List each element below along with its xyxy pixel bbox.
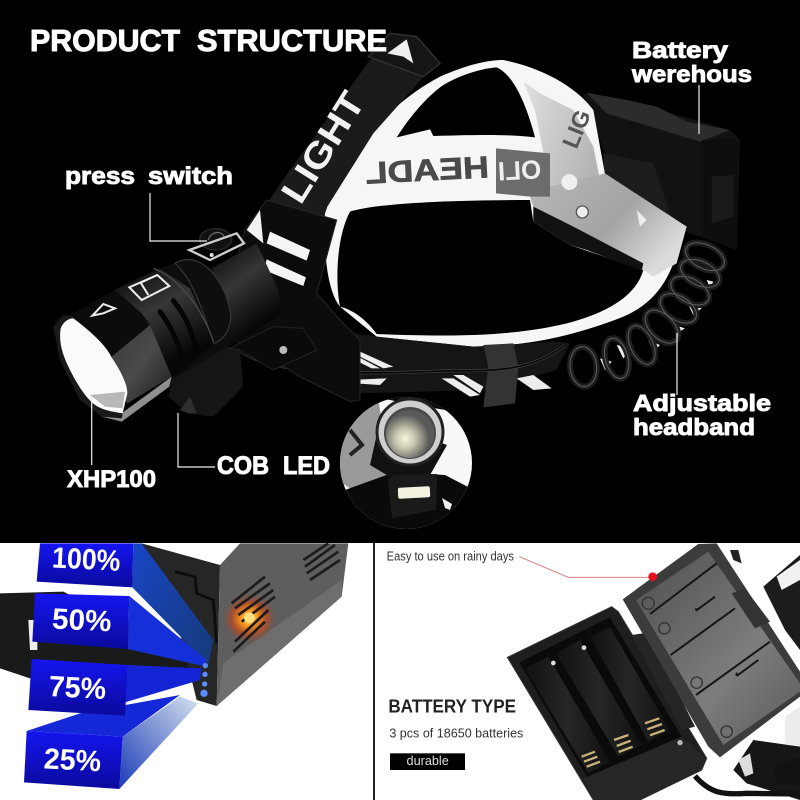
label: COB LED: LED <box>283 452 330 480</box>
pivot and mount <box>230 327 317 370</box>
mirrored strap lettering on tint: OLI <box>497 154 542 187</box>
strap underside shadow <box>533 207 643 271</box>
headband illustration <box>237 33 740 407</box>
inset flashlight body <box>370 438 447 475</box>
upper opening <box>397 67 535 137</box>
battery warehouse box <box>583 93 740 250</box>
lid lugs <box>642 597 732 737</box>
label 25% <box>24 731 123 789</box>
title: STRUCTURE <box>197 23 387 58</box>
callout line <box>519 557 650 577</box>
vents <box>232 543 340 652</box>
label 100% <box>37 543 133 587</box>
focus icon <box>129 275 169 300</box>
tray well <box>519 617 682 777</box>
leader: headband <box>676 333 678 395</box>
panel background <box>0 543 364 800</box>
callout dot <box>648 572 657 581</box>
beam 75 <box>125 665 202 702</box>
indicator LEDs <box>200 663 208 697</box>
label: COB LED <box>217 452 330 480</box>
top buckle <box>368 33 440 77</box>
label: Adjustable headband: Adjustable <box>633 390 771 416</box>
label 50% <box>32 593 129 649</box>
inset lens <box>386 410 434 458</box>
leader: COB LED <box>178 413 215 467</box>
white headband straps <box>325 60 687 347</box>
rainy days note: Easy to use on rainy days <box>387 549 514 564</box>
charging glow <box>223 593 276 643</box>
beam 100 <box>132 543 213 665</box>
battery box left face <box>142 543 220 706</box>
inset strap chevrons <box>350 430 362 455</box>
cell 1 <box>525 657 610 773</box>
indicator core <box>244 612 255 623</box>
panel: battery indicator <box>0 541 364 800</box>
text 50%: 50% <box>51 602 112 638</box>
leader: XHP100 <box>91 397 93 465</box>
right strap <box>730 550 800 800</box>
barrel ring edge <box>153 268 214 343</box>
lid dividers <box>650 563 770 695</box>
panel background <box>375 543 800 800</box>
label: Battery warehouse <box>631 37 752 87</box>
leader: battery <box>698 85 700 134</box>
press switch <box>189 229 244 260</box>
lid clasp <box>732 588 770 628</box>
beam 50 <box>128 596 207 666</box>
lid interior <box>636 552 800 745</box>
tray screw <box>677 740 683 745</box>
side bracket <box>227 200 360 402</box>
text 25%: 25% <box>43 742 102 778</box>
main strap <box>265 50 427 228</box>
divider line <box>373 543 375 800</box>
background: black product panel <box>0 0 800 543</box>
label: press switch: press <box>65 163 135 190</box>
title <box>30 23 387 58</box>
head facet <box>112 325 172 403</box>
cell 3 <box>590 627 670 742</box>
strap clip <box>483 343 518 407</box>
strap rivets <box>561 174 647 227</box>
transparent rear strap <box>530 173 687 277</box>
flashlight dark body <box>113 243 282 380</box>
inset COB housing <box>388 474 437 518</box>
lower opening <box>337 200 643 336</box>
inset COB lamp <box>398 486 430 499</box>
head strap <box>0 592 207 678</box>
label: XHP100: XHP100 <box>67 466 156 493</box>
lower strap chevrons <box>350 349 552 397</box>
front bezel <box>53 315 127 418</box>
coiled cable <box>568 237 729 388</box>
flashlight head <box>53 200 360 422</box>
text 100%: 100% <box>51 541 121 578</box>
triangle icon <box>92 304 115 316</box>
label: press switch: switch <box>148 163 233 190</box>
leader: press switch <box>150 193 207 241</box>
power cable <box>237 345 565 373</box>
strap lettering <box>28 620 37 650</box>
COB lamp highlight <box>180 397 197 413</box>
barrel grooves <box>160 301 197 362</box>
label: COB LED: COB <box>217 452 269 480</box>
main strap LIGHT lettering: LIGHT <box>273 84 373 210</box>
transparent top strap <box>523 82 603 197</box>
battery box right face <box>217 543 348 706</box>
battery description: 3 pcs of 18650 batteries <box>389 725 524 740</box>
open lid <box>623 543 800 757</box>
durable badge <box>390 753 465 770</box>
lens lower shadow <box>90 392 125 408</box>
head lower strip <box>102 377 172 422</box>
title: PRODUCT <box>30 23 180 58</box>
lower strap <box>343 332 570 393</box>
label: Adjustable headband: headband <box>633 414 755 440</box>
lens <box>60 318 127 413</box>
beam 25 side face <box>119 697 198 789</box>
mirrored strap lettering: HEADL <box>365 150 490 191</box>
neck ring <box>175 260 231 344</box>
inset close-up circle <box>338 396 474 532</box>
rear cylinder <box>212 243 282 347</box>
inset top dark band <box>388 397 445 410</box>
inset bezel inner <box>384 407 436 459</box>
inset bezel <box>377 399 443 465</box>
inset strap lower mark <box>442 498 452 510</box>
label: Adjustable headband <box>633 390 771 440</box>
zoom barrel <box>115 268 215 380</box>
power cable core <box>237 345 565 373</box>
text 75%: 75% <box>48 670 107 706</box>
hinge <box>632 633 695 730</box>
BATTERY TYPE heading: BATTERY TYPE <box>388 696 516 717</box>
box latch <box>175 572 217 643</box>
label: Battery warehouse: werehous <box>631 61 752 87</box>
panel: battery type <box>375 543 800 800</box>
beam 25 top face <box>27 695 180 737</box>
inset background <box>338 396 474 532</box>
head black top <box>55 290 150 357</box>
cable <box>695 776 800 794</box>
cell 2 <box>556 640 642 757</box>
battery tray <box>507 607 707 800</box>
COB lamp <box>168 343 243 417</box>
label: Battery warehouse: Battery <box>632 37 728 63</box>
panel divider <box>364 543 374 800</box>
tray front lip <box>583 737 706 800</box>
label: press switch <box>65 163 233 190</box>
inset strap <box>340 402 387 488</box>
label 75% <box>28 659 128 716</box>
cell terminals <box>551 645 586 665</box>
springs <box>582 718 665 767</box>
dark overlap block <box>496 148 550 197</box>
inset dark base <box>346 474 468 529</box>
top rear strap lettering: LIG <box>557 106 596 152</box>
box underside edge <box>217 580 342 706</box>
durable badge: durable <box>407 754 449 768</box>
